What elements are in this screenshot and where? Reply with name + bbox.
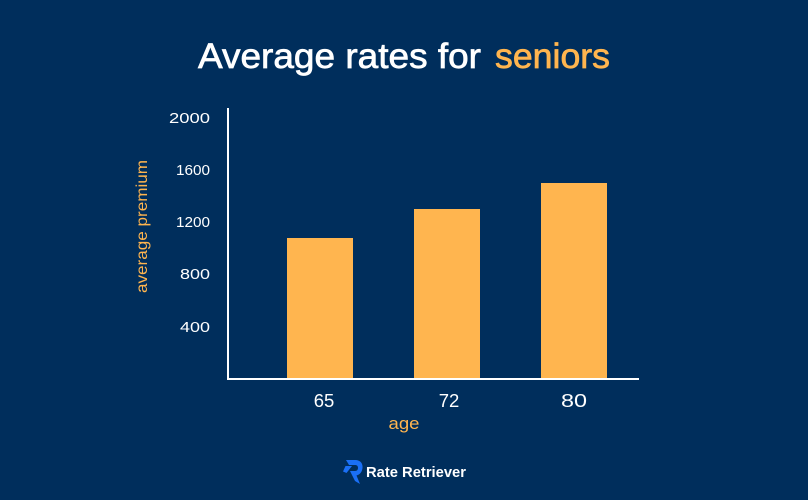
x axis tick labels: 72 xyxy=(439,390,459,411)
title: Average rates for xyxy=(198,37,481,76)
y axis tick labels: 1200 xyxy=(176,215,210,231)
y axis xyxy=(227,108,229,380)
x axis tick labels xyxy=(314,390,587,411)
title: seniors xyxy=(495,37,610,76)
bar: age 80 xyxy=(541,183,607,379)
bar: age 65 xyxy=(287,238,353,379)
wordmark: Rate Retriever xyxy=(366,465,466,481)
title xyxy=(198,37,610,76)
y axis tick labels: 1600 xyxy=(176,163,210,179)
x axis xyxy=(227,378,639,380)
bar chart xyxy=(134,108,639,433)
y axis title: average premium xyxy=(134,160,151,293)
x axis tick labels: 65 xyxy=(314,390,334,411)
icon: R mark xyxy=(343,460,363,484)
bar: age 72 xyxy=(414,209,480,379)
y axis tick labels xyxy=(169,111,210,336)
y axis tick labels: 2000 xyxy=(169,111,210,127)
y axis tick labels: 800 xyxy=(180,267,210,283)
y axis tick labels: 400 xyxy=(180,320,210,336)
x axis tick labels: 80 xyxy=(561,390,587,411)
x axis title: age xyxy=(388,414,420,433)
logo: Rate Retriever xyxy=(343,460,466,484)
